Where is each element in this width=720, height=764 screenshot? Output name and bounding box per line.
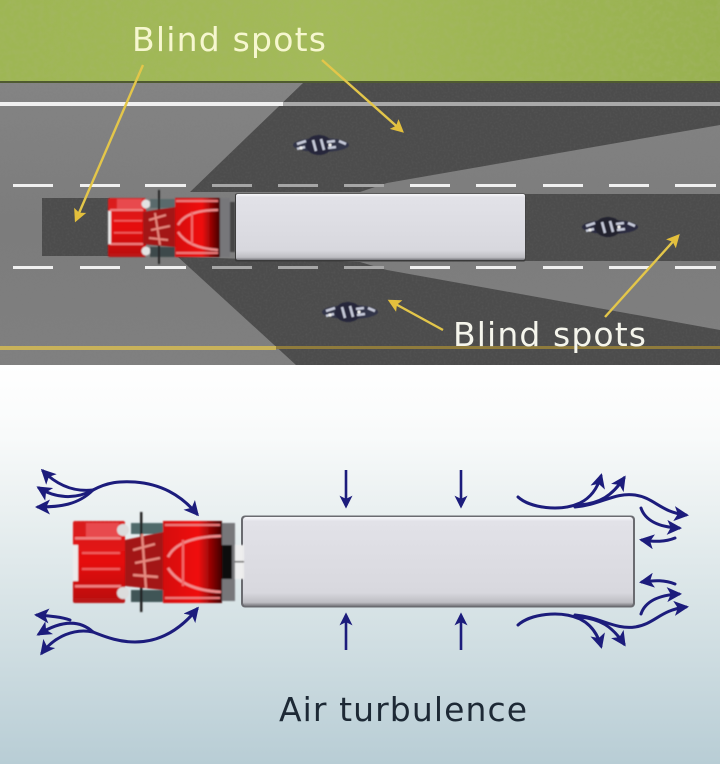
heading: air turbulence: Air turbulence: [279, 690, 527, 729]
truck cab, bottom: [73, 512, 244, 612]
blind spot zones: [42, 83, 720, 365]
arrows: wake behind trailer, upper: [518, 476, 686, 541]
road surface: [0, 83, 720, 365]
panel: blind spots road scene: [0, 0, 720, 365]
grass verge: [0, 0, 720, 83]
arrow: to rear blind spot: [76, 65, 143, 220]
motorcycle, lower lane: [322, 302, 378, 322]
truck cab, top: [108, 190, 235, 264]
panel: air turbulence diagram: [37, 470, 686, 729]
arrows: wake behind trailer, lower: [518, 581, 686, 646]
heading: blind spots, bottom: Blind spots: [453, 315, 646, 354]
arrows: inward pressure, top: [346, 470, 461, 506]
arrows: inward pressure, bottom: [346, 615, 461, 650]
arrow: to trailing blind spot: [605, 236, 678, 317]
motorcycle, behind trailer: [582, 217, 638, 237]
road texture: [0, 83, 720, 365]
road markings: [0, 102, 720, 350]
motorcycle, upper lane: [293, 135, 349, 155]
arrow: to lower side blind spot: [390, 301, 443, 330]
truck trailer, bottom: [241, 516, 635, 608]
arrows: turbulence at the cab, lower: [37, 609, 197, 653]
truck trailer, top: [235, 194, 526, 262]
arrows: turbulence at the cab, upper: [38, 471, 197, 514]
arrow: to upper side blind spot: [322, 60, 402, 131]
heading: blind spots, top: Blind spots: [132, 20, 326, 59]
